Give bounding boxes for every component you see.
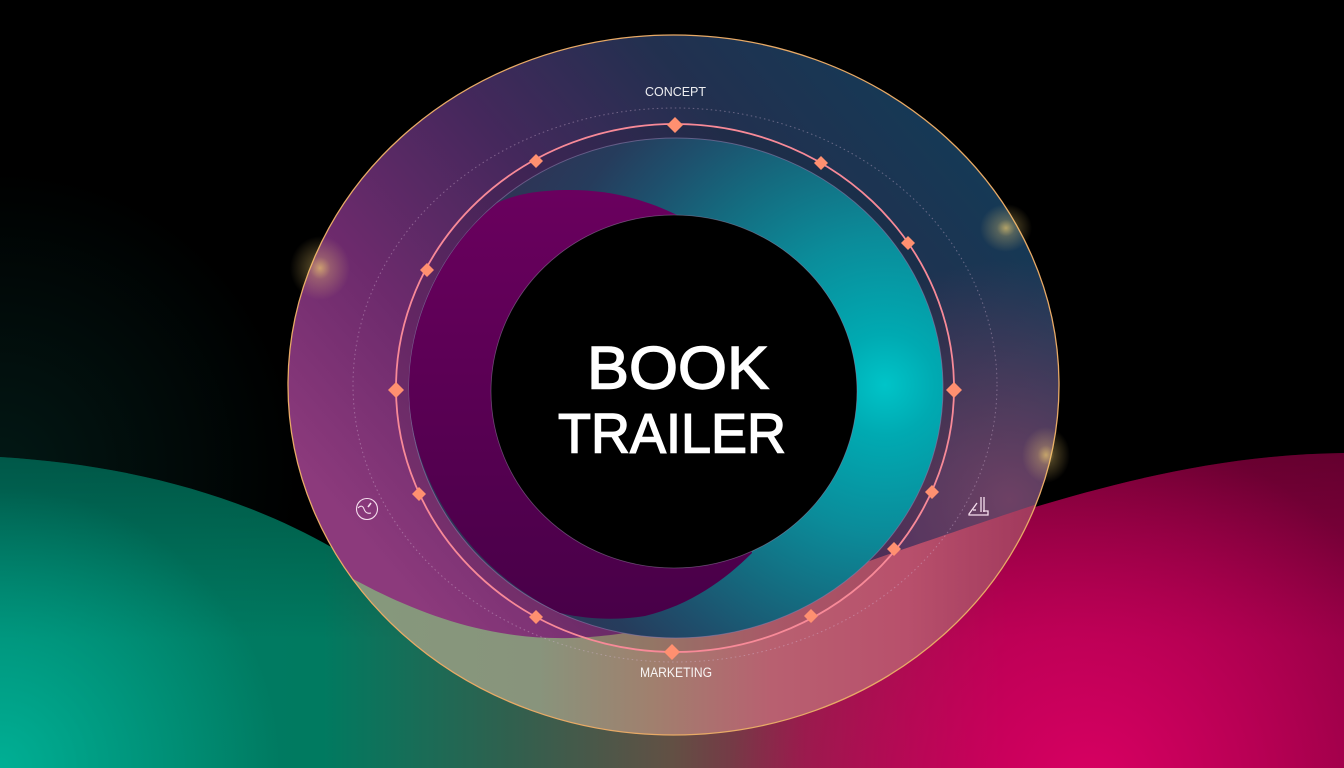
title: TRAILER [558,402,786,464]
dotted orbit [353,108,997,662]
icon: triangle ruler [969,497,988,515]
glow: left [290,236,350,300]
outer translucent ring [288,35,1059,735]
pink orbit line [396,124,954,652]
ring overlap with wave [353,504,1035,734]
band inside pink orbit [396,124,954,652]
glow: top right [980,204,1032,252]
inner teal disc [409,138,943,638]
purple crescent [409,190,752,619]
title: BOOK [587,334,769,402]
icon: gauge [356,498,378,520]
central black circle [491,215,857,568]
milestone diamonds [388,117,962,660]
label: marketing: MARKETING [640,665,712,680]
background wave: green to crimson [0,440,1344,768]
label: concept: CONCEPT [645,84,706,99]
title [558,334,786,464]
glow: lower right [1022,427,1070,483]
